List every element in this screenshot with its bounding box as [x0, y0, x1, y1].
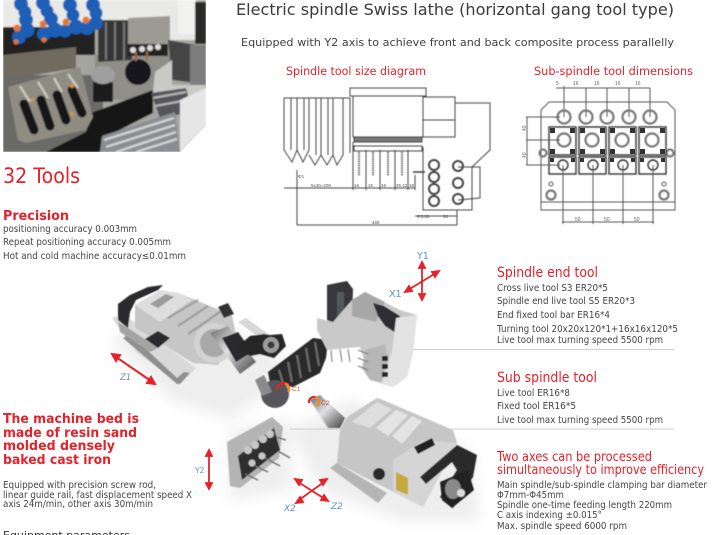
text block: precision: Repeat positioning accuracy 0.005mm — [3, 237, 171, 248]
text block: machine bed: Equipped with precision screw rod, — [3, 480, 156, 491]
sub-spindle dimension labels: 50 — [634, 217, 640, 223]
diagram dimension labels: 50 — [443, 214, 449, 219]
axis arrow: Y2 — [194, 450, 212, 489]
text block: sub spindle tool: Live tool ER16*8 — [497, 388, 570, 399]
diagram dimension labels: 5x40=200 — [311, 183, 331, 188]
sub-spindle dimension labels: 40 — [522, 152, 528, 158]
heading: sub-spindle tool dimensions: Sub-spindle tool dimensions — [534, 64, 693, 78]
axis arrows: X2 Z2: Z2 — [330, 502, 343, 512]
divider lines — [370, 348, 674, 350]
text block: two axes: Φ7mm-Φ45mm — [497, 490, 564, 501]
diagram dimension labels: 16 — [368, 183, 374, 188]
machine: sub spindle gang tool plate — [227, 417, 290, 488]
photo: gang tool interior — [3, 0, 206, 152]
sub-spindle dimension labels: 16 — [573, 81, 579, 87]
text block: sub spindle tool: Live tool max turning speed 5500 rpm — [497, 415, 663, 426]
diagram dimension labels: 16 — [381, 183, 387, 188]
axis arrows: X2 Z2: X2 — [283, 504, 296, 514]
sub-spindle dimension labels — [522, 81, 641, 223]
sub-spindle dimension labels: 50 — [575, 217, 581, 223]
diagram dimension labels: 16 — [354, 183, 360, 188]
diagram: spindle tool size — [284, 88, 490, 225]
axis arrow: Z1 — [112, 354, 155, 384]
icon: C1 rotation marker: C1 — [292, 386, 301, 393]
diagram dimension labels: Φ3.55 — [417, 214, 430, 219]
diagram dimension labels: 25.42 — [396, 183, 408, 188]
text block: precision: positioning accuracy 0.003mm — [3, 224, 137, 235]
text block: machine bed: made of resin sand — [3, 426, 137, 441]
machine background shadow — [110, 300, 480, 520]
text block: spindle end tool — [496, 265, 678, 346]
text block: spindle end tool: Live tool max turning speed 5500 rpm — [497, 335, 663, 346]
sub-spindle dimension labels: 50 — [604, 217, 610, 223]
sub-spindle dimension labels: 5 — [556, 81, 559, 87]
sub-spindle dimension labels: 16 — [635, 81, 641, 87]
text block: precision: Precision — [3, 209, 69, 224]
machine: sub spindle — [310, 395, 477, 508]
text block: two axes: Max. spindle speed 6000 rpm — [497, 521, 627, 532]
text block: machine bed: baked cast iron — [3, 453, 111, 468]
icon: C2 rotation marker — [309, 397, 330, 407]
axis arrows: X1 Y1 — [389, 251, 439, 300]
diagram dimension labels: Φ1 — [298, 174, 305, 179]
text block: machine bed: The machine bed is — [3, 412, 139, 427]
icon: C2 rotation marker: C2 — [321, 400, 330, 407]
diagram dimension labels: 468 — [372, 220, 380, 225]
diagram dimension labels: 16 — [409, 183, 415, 188]
sub-spindle dimension labels: 16 — [594, 81, 600, 87]
sub-spindle dimension labels: 16 — [615, 81, 621, 87]
heading: 32 tools: 32 Tools — [3, 164, 80, 188]
axis arrows: X2 Z2 — [283, 479, 343, 514]
text block: two axes: Two axes can be processed — [496, 449, 652, 465]
text block: two axes: Spindle one-time feeding length 220mm — [497, 500, 672, 511]
subtitle: Equipped with Y2 axis to achieve front and back composite process parallelly — [241, 36, 674, 49]
diagram dimension labels — [298, 174, 449, 225]
text block: spindle end tool: Turning tool 20x20x120*1+16x16x120*5 — [496, 324, 678, 335]
text block: precision: Hot and cold machine accuracy≤0.01mm — [3, 251, 186, 262]
text block: precision — [3, 209, 186, 262]
text block: spindle end tool: Spindle end live tool S5 ER20*3 — [497, 296, 635, 307]
icon: C1 rotation marker — [277, 383, 301, 393]
axis arrow: Y2: Y2 — [194, 466, 205, 475]
text block: spindle end tool: End fixed tool bar ER16*4 — [497, 310, 610, 321]
text block: machine bed: molded densely — [3, 439, 116, 454]
axis arrow: Z1: Z1 — [119, 373, 131, 383]
title: Electric spindle Swiss lathe (horizontal gang tool type) — [236, 0, 674, 19]
text block: sub spindle tool — [497, 370, 663, 426]
text block: spindle end tool: Cross live tool S3 ER20*5 — [497, 283, 608, 294]
sub-spindle dimension labels: 40 — [522, 125, 528, 131]
machine: main spindle — [112, 285, 286, 384]
diagram: sub-spindle tool dimensions — [526, 86, 675, 224]
machine: cable chain and end tool holder — [255, 281, 417, 408]
text block: sub spindle tool: Fixed tool ER16*5 — [497, 401, 576, 412]
text block: machine bed — [3, 412, 192, 510]
text block: machine bed: linear guide rail, fast displacement speed X — [3, 490, 192, 501]
axis arrows: X1 Y1: X1 — [389, 289, 402, 300]
text block: two axes: C axis indexing ±0.015° — [497, 510, 602, 521]
text block: machine bed: axis 24m/min, other axis 30m/min — [3, 499, 153, 510]
heading: spindle tool size diagram: Spindle tool size diagram — [286, 64, 426, 78]
axis arrows: X1 Y1: Y1 — [416, 251, 429, 262]
text block: spindle end tool: Spindle end tool — [497, 265, 598, 281]
text block: two axes — [496, 449, 707, 532]
text block: sub spindle tool: Sub spindle tool — [497, 370, 597, 386]
